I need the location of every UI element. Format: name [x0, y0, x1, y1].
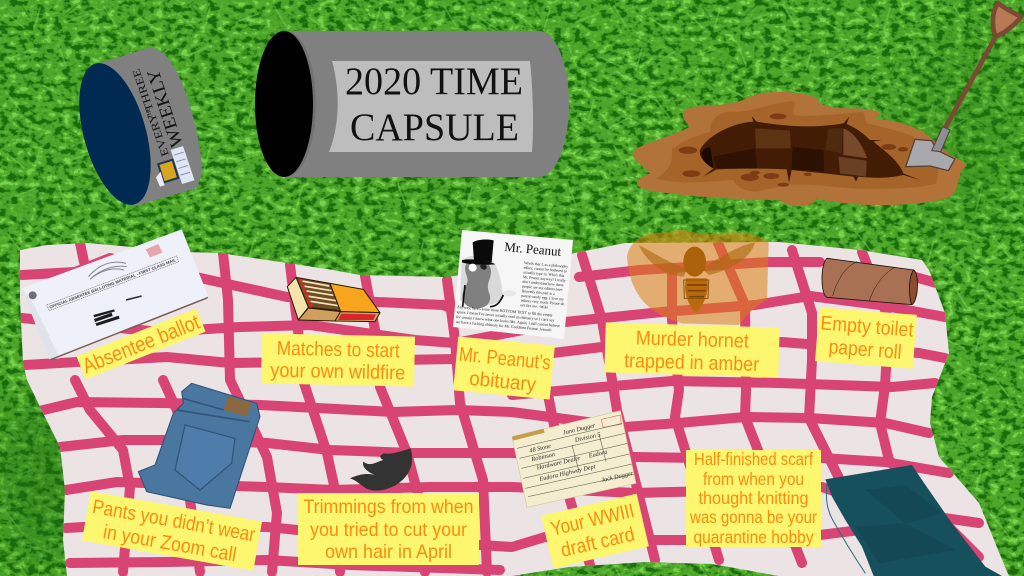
label: Trimmings: you tried to cut your — [310, 519, 467, 541]
obituary column text: Mr. Peanut anyway? I really — [523, 275, 566, 283]
obituary column text: Words that I, as a philosophy — [524, 261, 568, 270]
label: Empty toilet paper roll: paper roll — [828, 336, 902, 364]
item: empty toilet paper roll — [822, 258, 917, 305]
label: Half-finished scarf: thought knitting — [698, 488, 808, 508]
obituary bottom text — [456, 305, 561, 333]
obituary bottom text: for certain I know what one looks like. Again, I still cannot believe — [456, 315, 560, 329]
label: Trimmings: Trimmings from when — [304, 496, 474, 518]
obituary column text: people are my editors here. — [522, 284, 563, 292]
label: Matches: your own wildfire — [270, 360, 405, 384]
obituary heading: Mr. Peanut — [504, 239, 562, 259]
draft card handwriting: Eudora Highway Dept — [538, 463, 596, 483]
capsule title — [345, 60, 523, 149]
label: Empty toilet paper roll: Empty toilet — [820, 312, 914, 342]
redacted bars — [93, 309, 120, 326]
portrait: Mr. Peanut — [460, 240, 516, 308]
draft card form lines — [517, 423, 634, 497]
jeans patch — [223, 396, 252, 417]
draft card handwriting: Jack Dugger — [601, 470, 634, 484]
capsule title: 2020 TIME — [345, 60, 523, 103]
label: Murder hornet: trapped in amber — [624, 350, 760, 376]
item: hair trimmings — [350, 448, 412, 491]
label: WWIII draft card — [541, 494, 649, 568]
dirt clods — [679, 113, 908, 187]
label: Murder hornet: Murder hornet — [635, 327, 749, 353]
label: Empty toilet paper roll — [815, 307, 917, 369]
icon: beer mug logo — [150, 146, 195, 191]
item: matchbox — [287, 277, 380, 322]
draft card handwriting: Eudora — [587, 449, 608, 460]
label: Trimmings: own hair in April — [325, 541, 452, 563]
item: Mr. Peanut obituary clipping — [453, 230, 573, 339]
label: Half-finished scarf: was gonna be your — [689, 507, 817, 527]
jeans pocket — [175, 425, 235, 490]
lid text: The Every Three Weekly: EVERY THREE — [130, 67, 172, 158]
amber blob — [627, 230, 769, 325]
obituary column text — [520, 261, 568, 311]
obituary column text: editor, cannot be bothered to — [523, 266, 567, 274]
item: blue jeans — [138, 383, 260, 508]
draft card handwriting: Robinson — [530, 451, 556, 464]
label: Mr. Peanut's obituary: Mr. Peanut’s — [458, 344, 552, 374]
label: WWIII draft card: draft card — [559, 524, 637, 562]
draft card handwriting: 48 Stone — [529, 443, 552, 455]
obituary column text: parent-candy egg. I love my — [521, 294, 564, 302]
label: Pants — [82, 491, 262, 571]
capsule title: CAPSULE — [350, 106, 519, 149]
lid text: The Every Three Weekly — [130, 67, 187, 158]
ballot heading box: OFFICIAL ABSENTEE BALLOTING MATERIAL - FIRST CLASS MAIL — [49, 257, 177, 310]
hole pit — [700, 116, 920, 183]
lid side — [94, 48, 201, 206]
obituary column text: don't understand how these — [522, 280, 564, 287]
picnic blanket — [20, 242, 1009, 576]
lid text: The Every Three Weekly: WEEKLY — [143, 67, 187, 150]
item: murder hornet in amber — [627, 230, 769, 325]
hornet — [639, 243, 755, 313]
label: Mr. Peanut's obituary — [453, 336, 555, 400]
obituary column text: not fire me. -Mike — [520, 303, 549, 310]
icon: shovel — [906, 3, 1021, 171]
label: Half-finished scarf: Half-finished scarf — [694, 449, 813, 469]
label: Matches — [261, 333, 415, 387]
obituary column text: Honestly this part is a — [521, 289, 555, 296]
lid text: The Every Three Weekly: THE — [145, 107, 154, 119]
lid open face — [66, 55, 164, 213]
item: unfinished knitted scarf — [825, 465, 1002, 576]
label: Trimmings — [298, 493, 479, 565]
obituary column text: editors very much. Please do — [521, 298, 565, 306]
label: Half-finished scarf: quarantine hobby — [694, 527, 814, 547]
time capsule cylinder — [255, 31, 569, 177]
draft card handwriting — [526, 416, 634, 499]
capsule lid: The Every Three Weekly — [66, 48, 201, 213]
draft card handwriting: Division 5 — [573, 431, 601, 444]
obituary bottom text: we have a fucking obituary for Mr. Goddamn Peanut. Jeezorb — [456, 320, 552, 332]
obituary column text: actually type in. Who's this — [523, 270, 565, 278]
label: Pants: in your Zoom call — [101, 521, 238, 566]
capsule label — [329, 61, 533, 152]
label: Murder hornet — [604, 322, 780, 378]
draft card handwriting: Juno Dugger — [562, 422, 597, 437]
label: Half-finished scarf: from when you — [703, 469, 804, 489]
obituary bottom text: space. I mean I've never actually read an obituary so I can't say — [456, 310, 555, 323]
swoosh seal — [88, 262, 127, 279]
label: Absentee ballot: Absentee ballot — [79, 311, 203, 378]
label: Mr. Peanut's obituary: obituary — [468, 368, 537, 396]
item: absentee ballot envelope — [22, 229, 208, 360]
postage mark — [146, 244, 162, 257]
label: Half-finished scarf — [686, 449, 821, 547]
dug hole — [633, 92, 965, 206]
item: WWIII draft card — [512, 411, 636, 507]
label: WWIII draft card: Your WWIII — [549, 500, 636, 541]
draft card handwriting: Hardware Dealer — [535, 455, 582, 472]
obituary bottom text: Anyway, here's some more BOTTOM TEXT to fill the empty — [457, 305, 553, 318]
label: Pants: Pants you didn’t wear — [91, 496, 257, 546]
label: Matches: Matches to start — [276, 338, 400, 362]
